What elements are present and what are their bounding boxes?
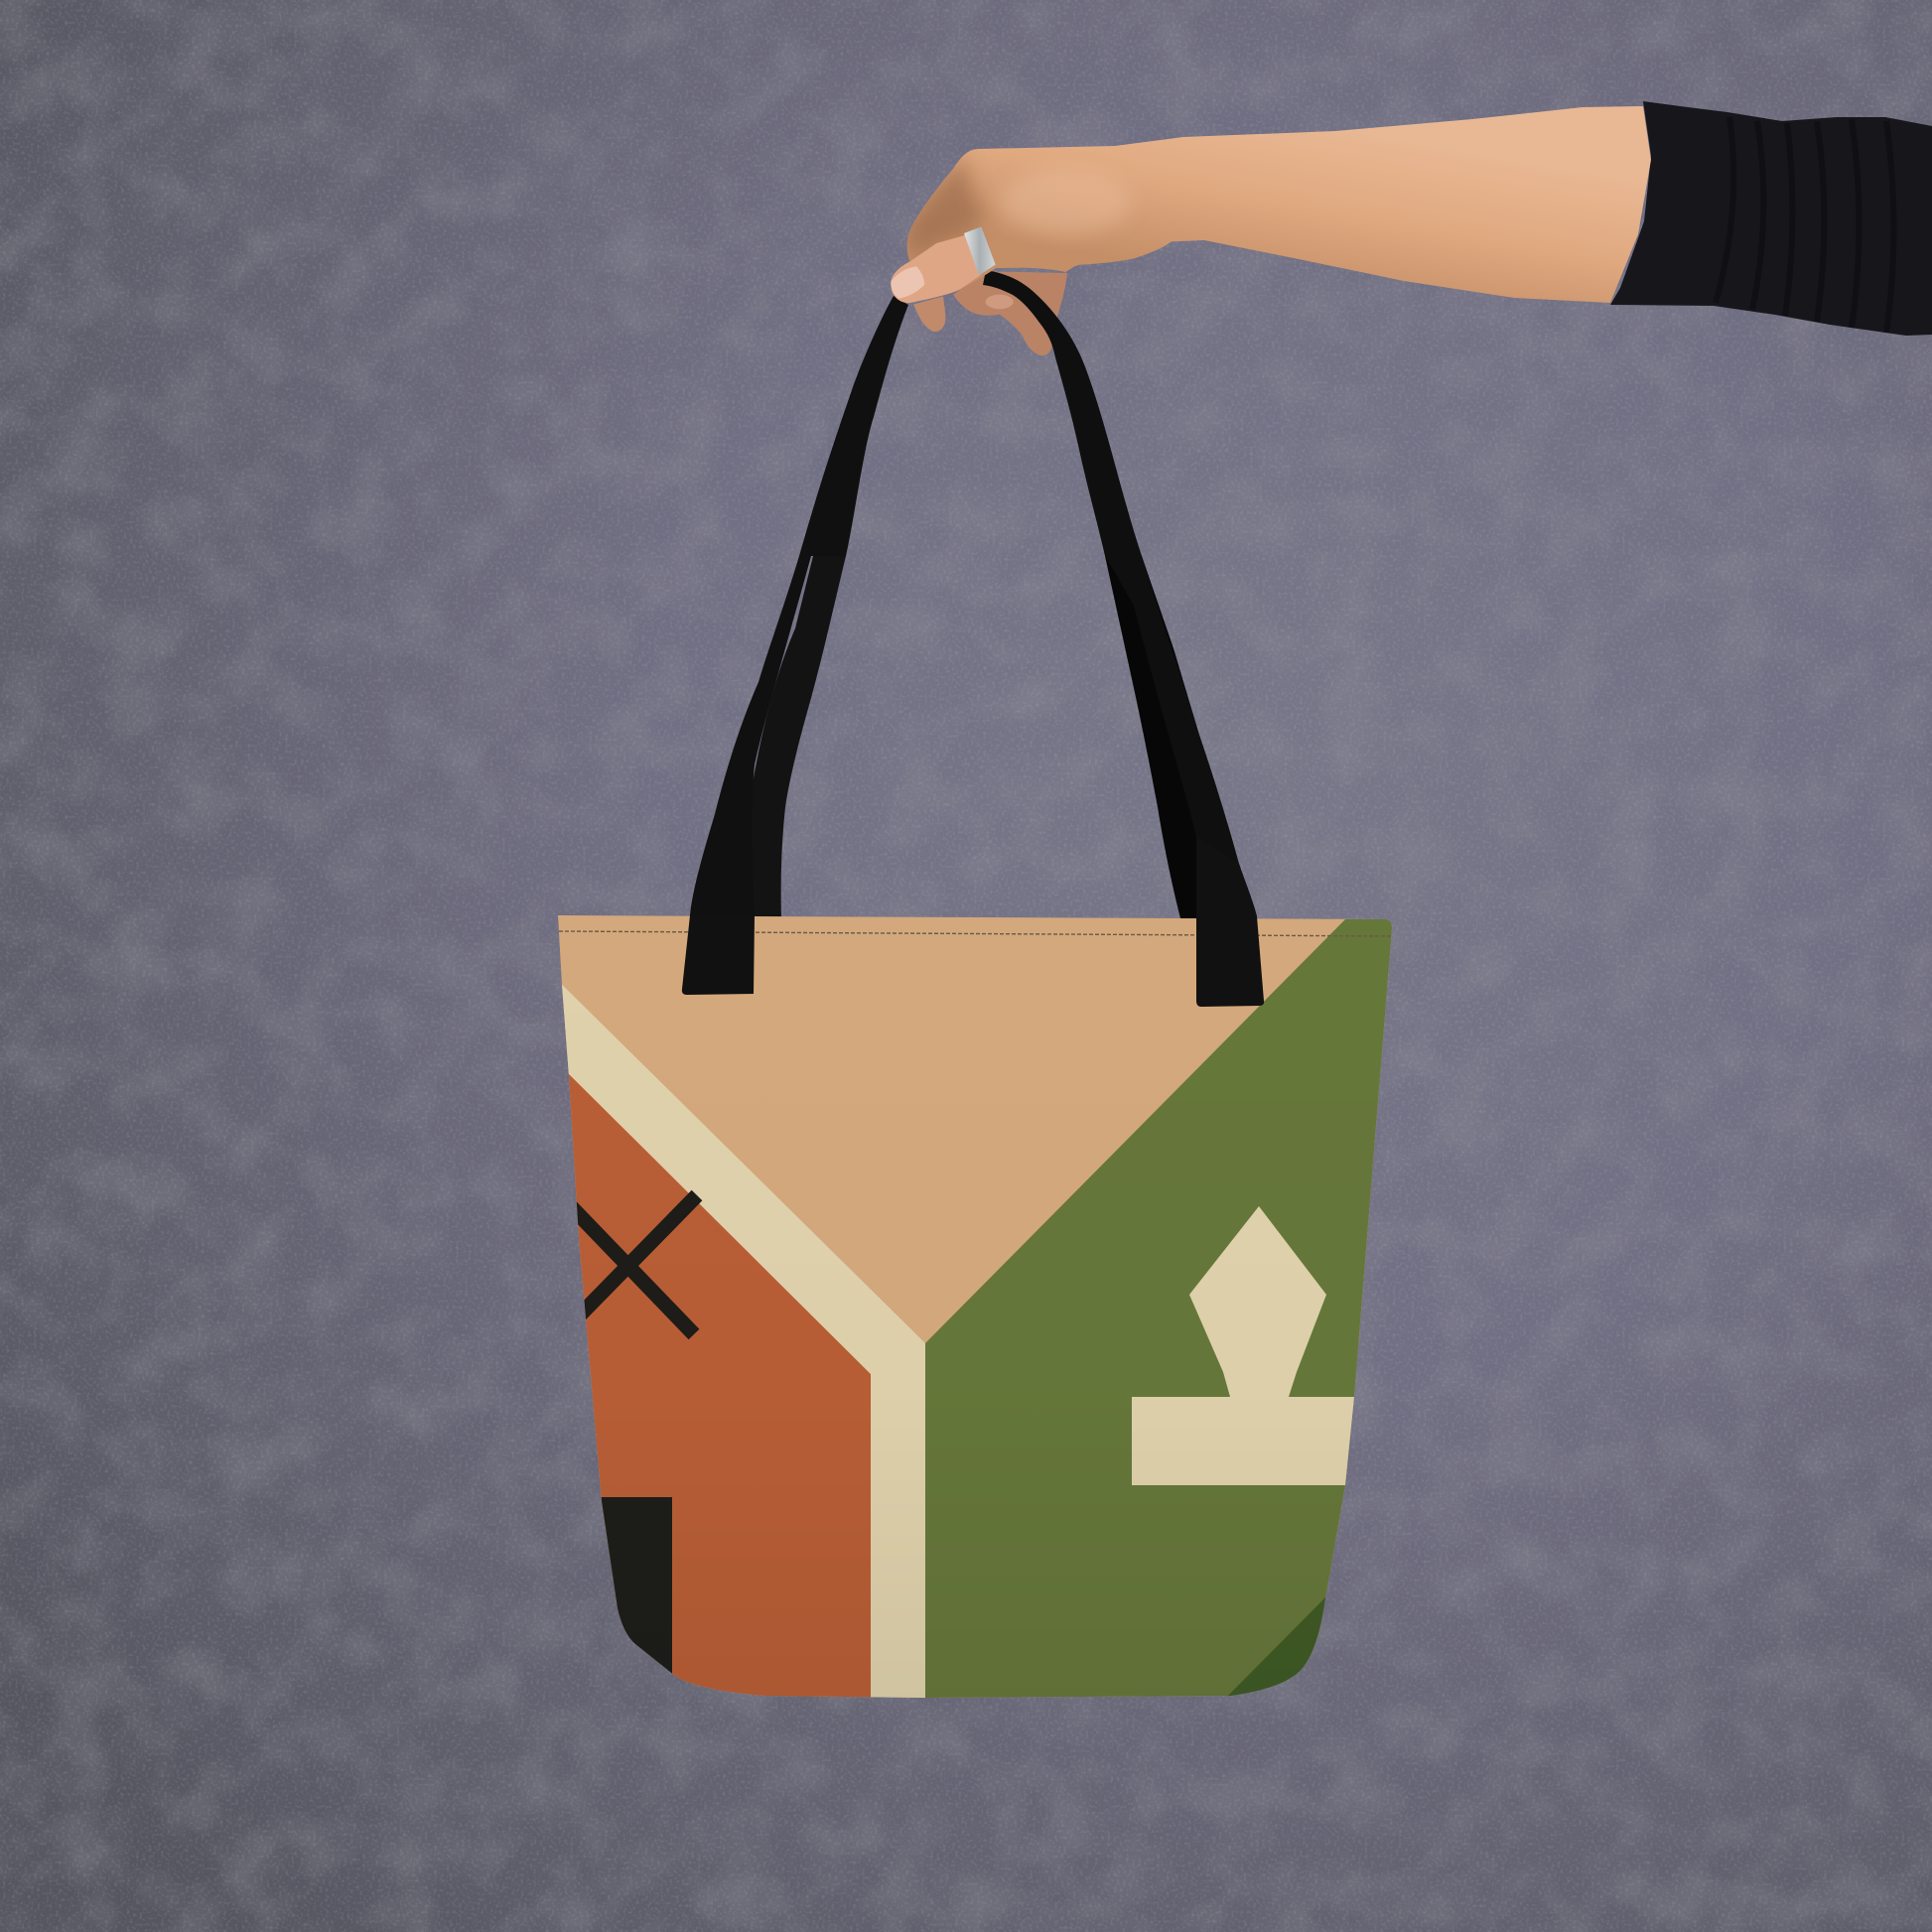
forearm, hand, thumb and ring	[891, 106, 1651, 303]
bag strap, right front	[983, 270, 1264, 1007]
top seam stitching	[559, 931, 1392, 936]
arm sleeve	[1610, 101, 1932, 336]
skin shape	[891, 106, 1651, 303]
bag back strap, right	[1105, 556, 1216, 918]
strap tab, left	[682, 915, 755, 995]
fingers behind the strap	[913, 271, 1067, 355]
black X mark	[566, 1195, 697, 1334]
bag strap, left front	[682, 296, 908, 995]
tote bag	[558, 915, 1392, 1698]
thumbnail	[891, 266, 924, 299]
thumb	[891, 235, 981, 303]
black rectangle	[602, 1497, 672, 1674]
bag back strap, left	[745, 556, 846, 918]
ring	[964, 226, 996, 275]
bottom shading	[536, 894, 1430, 1718]
dark green corner	[1228, 1596, 1326, 1696]
cream chess-piece shape	[1132, 1206, 1354, 1485]
panel: green right	[925, 919, 1410, 1718]
panel: orange left	[568, 1074, 871, 1698]
strap tab, right	[1196, 837, 1264, 1007]
soft skin shading	[906, 156, 1132, 261]
panel: tan top	[558, 915, 1392, 1698]
cream Y band	[562, 985, 925, 1698]
